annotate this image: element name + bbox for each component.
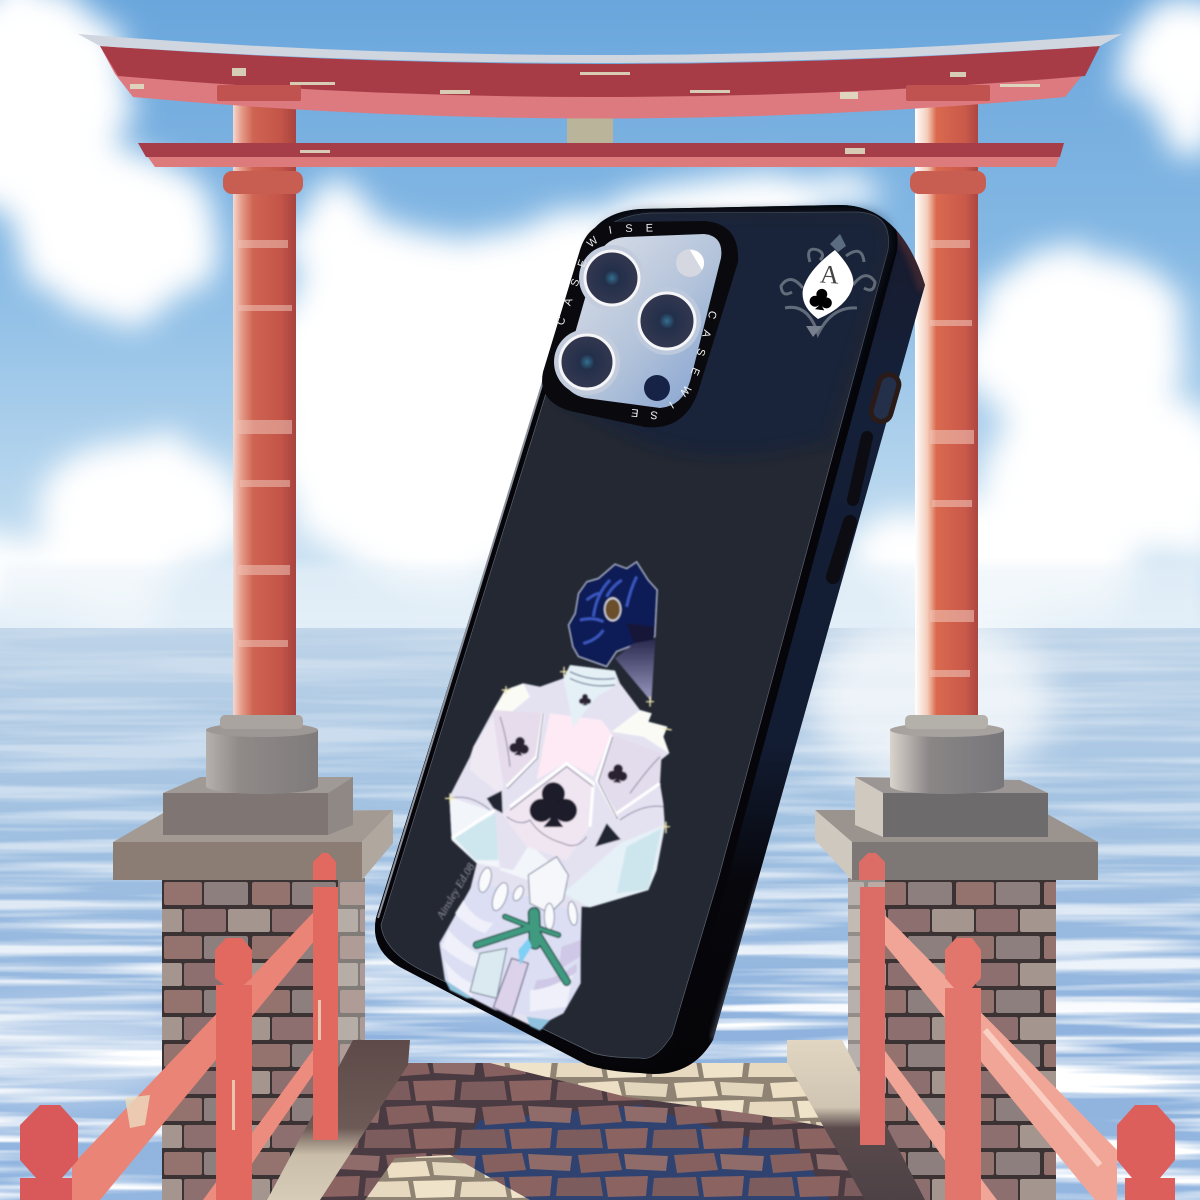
lens bottom [554,329,620,395]
left stone base [113,715,393,1200]
post caps [217,85,990,101]
phone with case [375,202,925,1074]
flash [676,249,704,277]
middle post [945,938,981,1200]
sunlit paving [490,1063,845,1130]
microphone sensor [644,375,670,401]
forearm shading [453,813,662,893]
left pauldron [493,710,543,787]
blue gem [518,938,532,965]
floor base [318,1063,882,1200]
large club [530,782,577,827]
front post [20,1105,78,1200]
left curb [267,1040,410,1200]
rail highlight [985,1030,1100,1165]
clouds [0,0,1200,630]
knight illustration [434,562,672,1031]
post near pier [859,853,885,1145]
sunlit patch lower left [365,1155,530,1200]
water pools [420,1105,830,1200]
feather highlights [580,577,637,643]
golden sparkles [445,667,672,833]
brand text right: CASEWISE [631,311,716,420]
raven beak [615,639,655,702]
right railing [859,853,1175,1200]
sky background [0,0,1200,640]
skirt lilac bands [533,940,581,990]
left upper arm [470,717,503,795]
leg below skirt [445,980,550,1031]
skirt left lit bands [442,900,573,1012]
throat feathers [627,623,654,647]
armor linework [450,713,663,846]
sea [0,610,1200,1200]
post near pier [313,853,338,1140]
gaps between arms and torso [487,791,621,847]
ace letter: A [819,259,840,290]
brand text left: CASEWISE [557,224,653,324]
raven head [568,562,657,667]
base slab [113,810,393,880]
lens top [579,245,645,311]
stone bridge floor [267,1040,925,1200]
ornate panel [470,948,507,998]
top rail [72,895,330,1200]
sword blade [493,958,528,1017]
face tint [560,212,889,455]
raven eye [604,597,621,621]
left forearm [449,797,553,883]
green gauntlet [477,913,567,982]
base step [855,777,1048,837]
tassets [476,866,579,930]
base cylinder [206,715,318,794]
case body [375,205,925,1074]
skirt plates [439,880,581,1020]
neck collar [563,665,617,727]
brick pier [848,878,1056,1200]
belly plate [502,763,593,860]
torii gate [78,34,1122,720]
base step [163,777,353,835]
peeling paint flecks [130,68,1040,154]
top lintel [78,34,1122,118]
spade shape [803,250,853,319]
camera plate [564,234,721,408]
left edge highlight [378,375,545,918]
front post [1117,1105,1175,1200]
camera bumper [542,221,738,428]
hands [528,857,568,913]
tie beam [138,143,1064,167]
ace of clubs emblem [781,234,875,337]
chest plate [537,713,612,780]
armor outlines [452,713,660,838]
shoulder ridges [493,683,669,753]
brick pier [162,878,365,1200]
horizon haze [0,565,1200,628]
right stone base [815,715,1098,1200]
signature: Ainsley Ed.08 [434,861,478,922]
side buttons [833,372,901,577]
case rim shading [381,206,925,1059]
top rail [867,897,1117,1200]
base cylinder [890,715,1004,794]
armor silhouette [439,665,669,1030]
lens right [633,287,701,355]
left pillar [223,95,303,720]
right curb [787,1040,925,1200]
right pillar [910,95,986,720]
right shoulder club [607,763,628,783]
left railing [20,853,338,1200]
right pauldron [597,735,662,817]
centre strut [567,100,613,143]
middle post [215,938,252,1200]
emblem ornament [781,249,875,334]
right forearm [563,825,663,907]
club suit [809,287,834,311]
paint wear [125,1000,321,1130]
shaded paving [318,1063,882,1200]
collar club [579,694,591,705]
base slab [815,810,1098,880]
lower rail [203,1027,330,1200]
left shoulder club [508,736,530,757]
lower rail [867,1027,997,1200]
case back face [381,212,889,1059]
